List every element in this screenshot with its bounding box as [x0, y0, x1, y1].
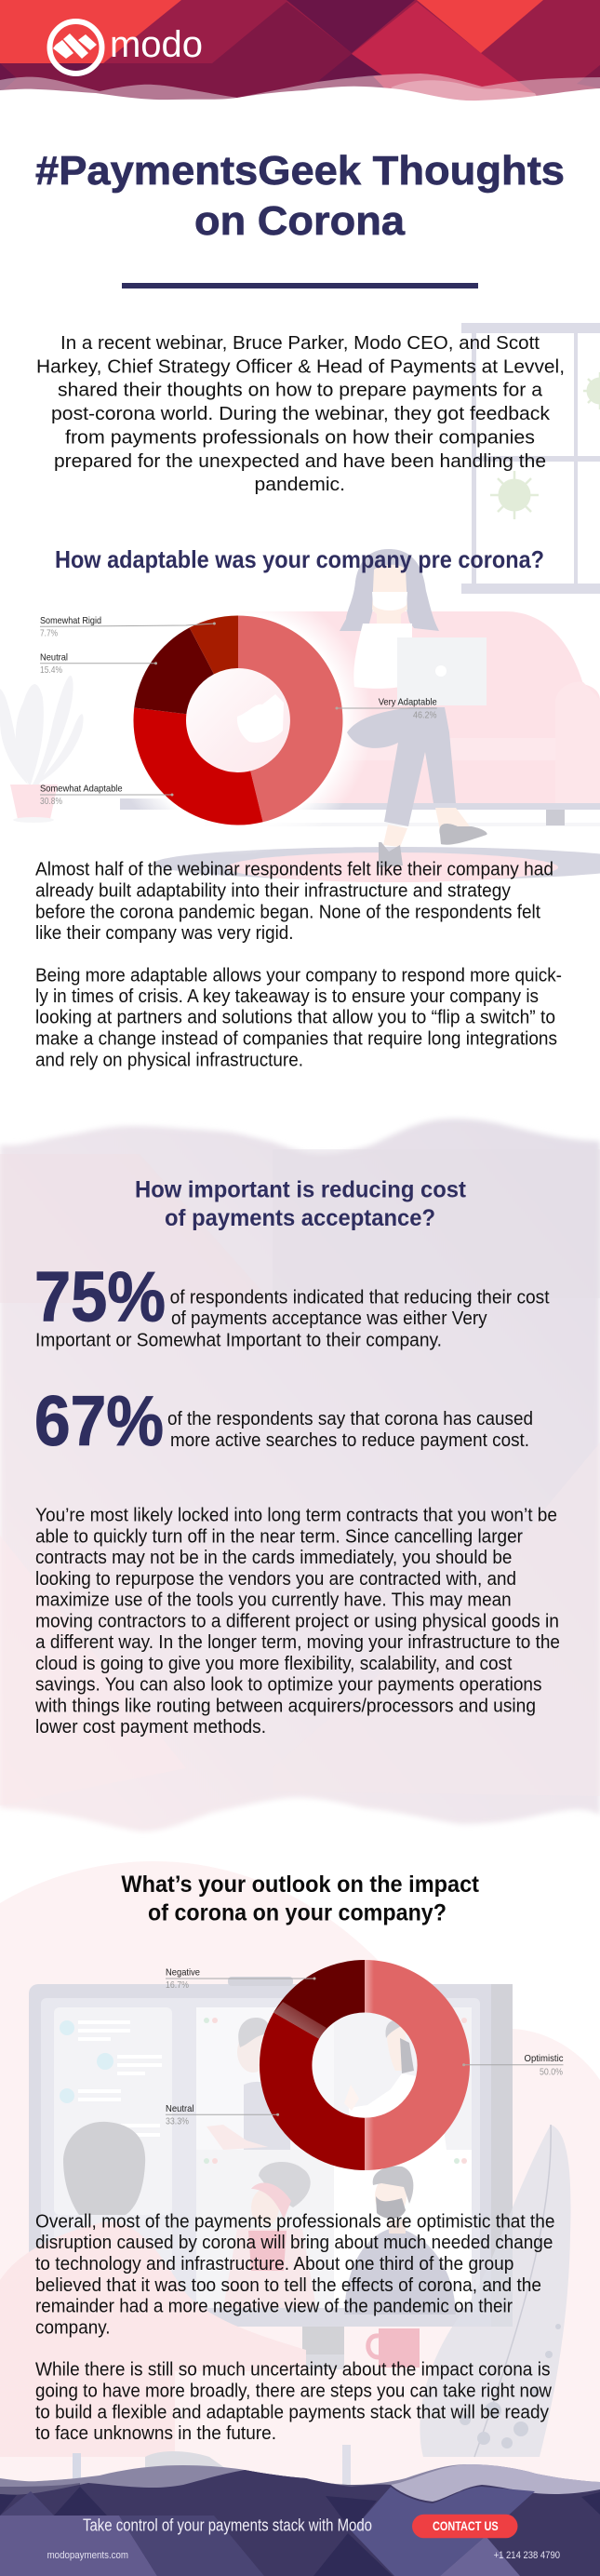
- illustration: potted plant: [0, 676, 84, 823]
- title divider: [122, 283, 478, 288]
- text: adaptability findings: already built adaptability into their infrastructure and strategy: [35, 880, 511, 901]
- chart labels: adaptability: 15.4%: [40, 664, 62, 676]
- segment: somewhat rigid 7.7%: [190, 616, 238, 674]
- text: outlook findings: disruption caused by corona will bring about much needed change: [35, 2233, 553, 2253]
- intro text: pandemic.: [255, 475, 345, 495]
- title: #PaymentsGeek Thoughts: [35, 148, 565, 194]
- footer call to action text: Take control of your payments stack with Modo: [83, 2516, 372, 2534]
- text: cost advice: able to quickly turn off in the near term. Since cancelling larger: [35, 1526, 523, 1547]
- chart labels: outlook: Optimistic: [525, 2053, 564, 2064]
- text: outlook findings: Overall, most of the payments professionals are optimistic that the: [35, 2211, 554, 2232]
- window backdrop: [461, 323, 600, 594]
- stat: 75%: of respondents indicated that reducing their cost: [170, 1287, 550, 1308]
- footer website: modopayments.com: [47, 2550, 128, 2561]
- text: cost advice: moving contractors to a different project or using physical goods in: [35, 1611, 559, 1631]
- video person: bottom right: [344, 2167, 456, 2314]
- illustration: stand: [175, 2327, 344, 2369]
- panel: outlook section background: [0, 1861, 600, 2494]
- intro text: prepared for the unexpected and have been handling the: [54, 451, 546, 472]
- segment: optimistic 50%: [365, 1960, 470, 2170]
- segment: neutral 15.4%: [134, 627, 214, 714]
- text: cost advice: You’re most likely locked into long term contracts that you won’t be: [35, 1506, 557, 1526]
- chart labels: outlook: Neutral: [166, 2103, 193, 2114]
- logo: [50, 21, 203, 76]
- chart labels: adaptability: Neutral: [40, 652, 68, 664]
- chart labels: outlook: 50.0%: [540, 2066, 563, 2077]
- text: outlook findings: going to have more broadly, there are steps you can take right now: [35, 2381, 553, 2401]
- text: outlook findings: to face unknowns in the future.: [35, 2423, 276, 2444]
- panel: cost section background: [0, 1119, 600, 1831]
- stat: 67%: [34, 1382, 533, 1461]
- text: cost advice: [34, 1506, 560, 1737]
- text: adaptability findings: ly in times of crisis. A key takeaway is to ensure your company is: [35, 986, 539, 1007]
- video person: top right: [344, 2019, 447, 2150]
- intro text: post-corona world. During the webinar, they got feedback: [51, 404, 551, 424]
- chart labels: adaptability: Somewhat Rigid: [40, 615, 101, 626]
- illustration: woman on sofa: [103, 549, 600, 882]
- text: outlook findings: [35, 2211, 554, 2444]
- intro text: from payments professionals on how their companies: [65, 427, 535, 448]
- video person: bottom left: [223, 2162, 316, 2308]
- illustration: chair legs: [73, 2445, 351, 2486]
- text: cost advice: cloud is going to give you more flexibility, scalability, and cost: [35, 1654, 513, 1674]
- title: on Corona: [194, 198, 406, 244]
- text: adaptability findings: [35, 859, 562, 1071]
- text: adaptability findings: and rely on physical infrastructure.: [35, 1051, 303, 1071]
- icon: virus: [490, 372, 600, 519]
- title: [35, 148, 565, 244]
- donut chart: adaptability: [133, 616, 342, 825]
- illustration: leaf: [420, 2125, 571, 2457]
- button: contact us: CONTACT US: [433, 2518, 499, 2533]
- text: adaptability findings: like their company was very rigid.: [35, 923, 294, 944]
- chart labels: adaptability: [40, 615, 437, 807]
- text: outlook findings: remainder had a more negative view of the pandemic on their: [35, 2297, 513, 2317]
- illustration: mug: [368, 2328, 420, 2368]
- text: cost advice: maximize use of the tools you currently have. This may mean: [35, 1590, 512, 1610]
- text: outlook findings: company.: [35, 2318, 110, 2339]
- text: adaptability findings: Almost half of the webinar respondents felt like their company had: [35, 859, 553, 879]
- text: adaptability findings: looking at partners and solutions that allow you to “flip a switch” to: [35, 1008, 555, 1028]
- heading: reducing cost: How important is reducing cost: [135, 1176, 467, 1202]
- stat: 75%: [34, 1258, 550, 1350]
- intro text: In a recent webinar, Bruce Parker, Modo CEO, and Scott: [60, 333, 540, 354]
- logo: modo: [110, 24, 203, 65]
- segment: somewhat adaptable 30.8%: [133, 707, 263, 825]
- text: cost advice: looking to repurpose the vendors you are contracted with, and: [35, 1569, 516, 1590]
- segment: very adaptable 46.2%: [238, 616, 342, 822]
- chart labels: adaptability: 7.7%: [40, 628, 58, 639]
- video person: top left: [207, 2018, 290, 2150]
- heading: reducing cost: of payments acceptance?: [165, 1205, 435, 1231]
- chart labels: outlook: Negative: [166, 1967, 200, 1979]
- heading: outlook: [121, 1872, 480, 1925]
- text: adaptability findings: before the corona pandemic began. None of the respondents felt: [35, 902, 540, 922]
- stat: 75%: 75%: [34, 1258, 166, 1337]
- chart labels: outlook: [166, 1967, 564, 2127]
- illustration: viewer body: [0, 2221, 306, 2457]
- stat: 75%: of payments acceptance was either Very: [171, 1308, 487, 1329]
- footer banner: [0, 2464, 600, 2576]
- intro text: [36, 333, 565, 495]
- header banner: [0, 0, 600, 116]
- text: adaptability findings: Being more adaptable allows your company to respond more quick-: [35, 965, 562, 986]
- heading: reducing cost: [135, 1176, 467, 1231]
- segment: neutral 33.3%: [260, 2012, 365, 2170]
- text: adaptability findings: make a change instead of companies that require long integrations: [35, 1029, 557, 1050]
- text: cost advice: a different way. In the longer term, moving your infrastructure to the: [35, 1632, 560, 1653]
- illustration: video call monitor: [0, 1977, 571, 2486]
- stat: 67%: more active searches to reduce payment cost.: [170, 1430, 529, 1451]
- chart labels: outlook: 33.3%: [166, 2116, 189, 2127]
- chart labels: adaptability: 46.2%: [413, 710, 437, 721]
- text: outlook findings: to technology and infrastructure. About one third of the group: [35, 2254, 513, 2274]
- intro text: Harkey, Chief Strategy Officer & Head of Payments at Levvel,: [36, 356, 565, 377]
- text: outlook findings: believed that it was too soon to tell the effects of corona, and the: [35, 2275, 541, 2296]
- heading: adaptability: How adaptable was your company pre corona?: [55, 545, 544, 573]
- segment: negative 16.7%: [273, 1960, 365, 2039]
- heading: outlook: What’s your outlook on the impact: [121, 1872, 480, 1898]
- text: cost advice: contracts may not be in the cards immediately, you should be: [35, 1548, 512, 1568]
- donut chart: outlook: [260, 1960, 470, 2170]
- footer phone: +1 214 238 4790: [494, 2550, 560, 2561]
- button: contact us: [412, 2515, 517, 2538]
- video person: viewer head: [63, 2122, 145, 2215]
- text: outlook findings: While there is still so much uncertainty about the impact corona is: [35, 2359, 551, 2380]
- chart labels: adaptability: 30.8%: [40, 796, 62, 807]
- text: cost advice: lower cost payment methods.: [35, 1717, 266, 1737]
- chart labels: outlook: 16.7%: [166, 1979, 189, 1991]
- text: cost advice: with things like routing between acquirers/processors and using: [34, 1696, 536, 1716]
- text: outlook findings: to build a flexible and adaptable payments stack that will be ready: [35, 2402, 549, 2422]
- chart labels: adaptability: Somewhat Adaptable: [40, 784, 123, 795]
- stat: 75%: Important or Somewhat Important to their company.: [35, 1330, 442, 1350]
- stat: 67%: of the respondents say that corona has caused: [167, 1409, 533, 1429]
- heading: outlook: of corona on your company?: [148, 1899, 447, 1925]
- intro text: shared their thoughts on how to prepare payments for a: [58, 381, 543, 401]
- text: cost advice: savings. You can also look to optimize your payments operations: [35, 1674, 541, 1695]
- stat: 67%: 67%: [34, 1382, 164, 1461]
- chart labels: adaptability: Very Adaptable: [379, 697, 437, 708]
